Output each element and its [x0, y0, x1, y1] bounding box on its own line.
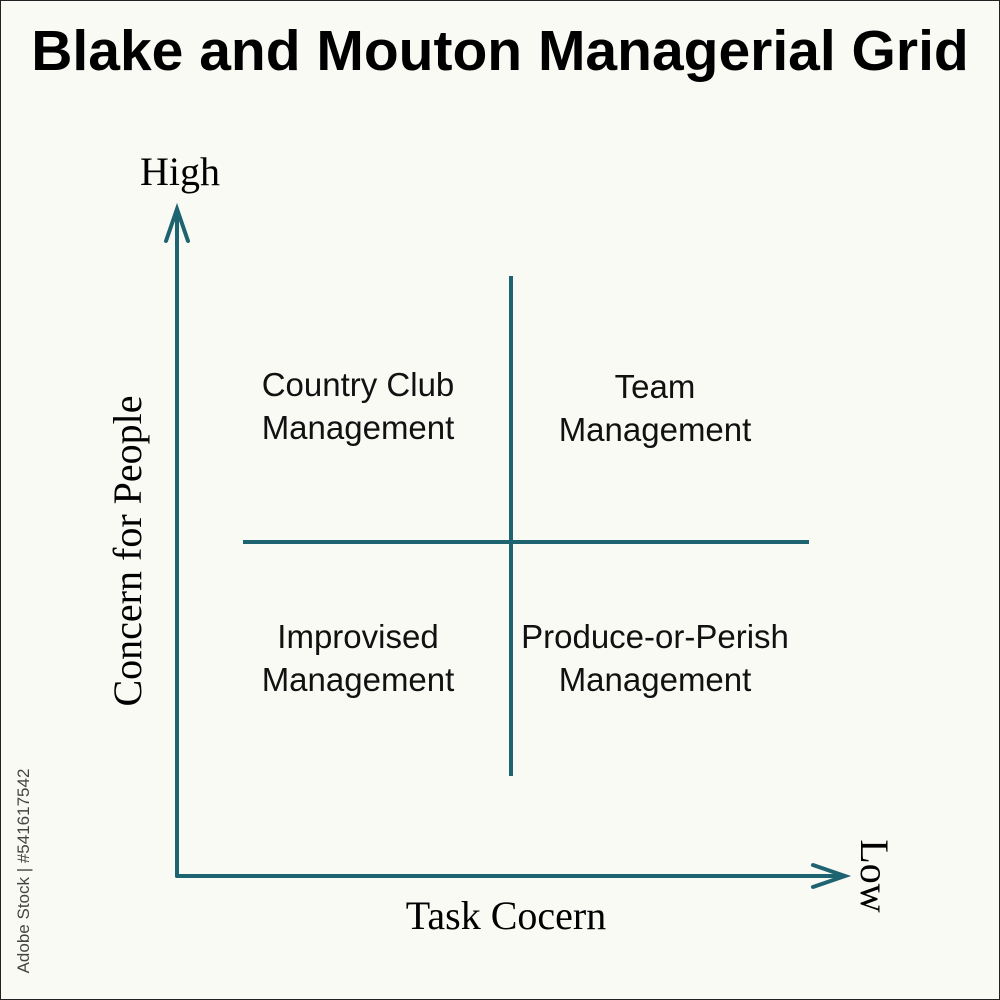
- quadrant: Produce-or-Perish: [521, 618, 789, 698]
- quadrant: Country Club: Country Club: [262, 366, 454, 403]
- grid dividers: [243, 276, 809, 776]
- quadrant: Improvised: Management: [262, 661, 454, 698]
- quadrant: Produce-or-Perish: Management: [559, 661, 751, 698]
- axis: horizontal: [177, 865, 845, 887]
- label: Concern for People: Concern for People: [105, 395, 150, 707]
- quadrant: Improvised: Improvised: [277, 618, 439, 655]
- label: Low: Low: [852, 839, 897, 913]
- quadrant: Team: Management: [559, 411, 751, 448]
- quadrant: Country Club: [262, 366, 454, 446]
- quadrant: Team: [559, 368, 751, 448]
- axis: vertical: [166, 209, 188, 876]
- quadrant: Produce-or-Perish: Produce-or-Perish: [521, 618, 789, 655]
- label: Task Cocern: Task Cocern: [406, 893, 606, 938]
- quadrant: Improvised: [262, 618, 454, 698]
- label: High: High: [140, 149, 220, 194]
- quadrant: Country Club: Management: [262, 409, 454, 446]
- quadrant: Team: Team: [615, 368, 695, 405]
- title: Blake and Mouton Managerial Grid: [31, 19, 969, 83]
- watermark id: Adobe Stock | #541617542: [14, 769, 33, 973]
